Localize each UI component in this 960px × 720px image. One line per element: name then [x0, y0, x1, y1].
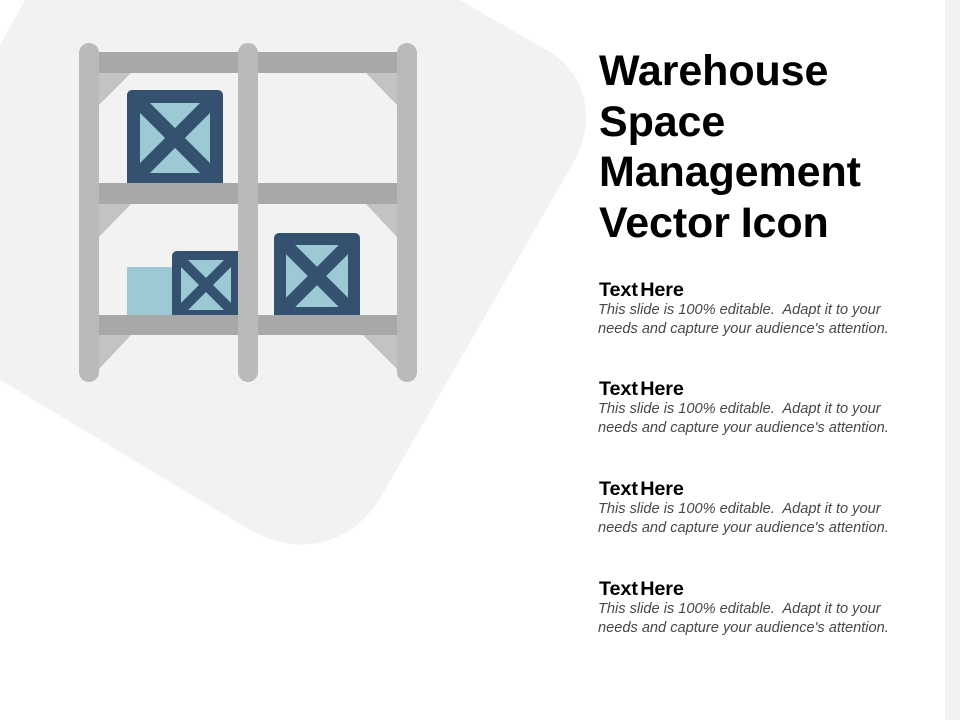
- text block 1: This slide is 100% editable. Adapt it to your: [598, 302, 881, 318]
- shelf posts: [79, 43, 417, 382]
- text block 3: [598, 478, 889, 536]
- text block 1: Text Here: [599, 279, 684, 301]
- icon: warehouse shelf: [79, 43, 417, 382]
- text block 3: needs and capture your audience's attention.: [598, 520, 889, 536]
- shelf boards: [99, 52, 397, 335]
- text block 4: [598, 578, 889, 636]
- text block 4: Text Here: [599, 578, 684, 600]
- crate: small lower: [172, 251, 238, 315]
- text block 2: [598, 378, 889, 436]
- text block 3: Text Here: [599, 478, 684, 500]
- box: plain light blue: [127, 267, 173, 315]
- text block 1: [598, 279, 889, 337]
- text block 2: Text Here: [599, 378, 684, 400]
- text block 2: needs and capture your audience's attention.: [598, 420, 889, 436]
- text block 2: This slide is 100% editable. Adapt it to your: [598, 401, 881, 417]
- shelf braces: [99, 73, 397, 369]
- title: Warehouse Space Management Vector Icon: [599, 47, 861, 247]
- text block 1: needs and capture your audience's attention.: [598, 321, 889, 337]
- crate: upper left: [127, 90, 223, 183]
- right edge strip: [945, 0, 960, 720]
- text block 3: This slide is 100% editable. Adapt it to your: [598, 501, 881, 517]
- background rounded shape: [0, 0, 586, 545]
- text block 4: This slide is 100% editable. Adapt it to your: [598, 601, 881, 617]
- text block 4: needs and capture your audience's attention.: [598, 620, 889, 636]
- crate: lower right: [274, 233, 360, 315]
